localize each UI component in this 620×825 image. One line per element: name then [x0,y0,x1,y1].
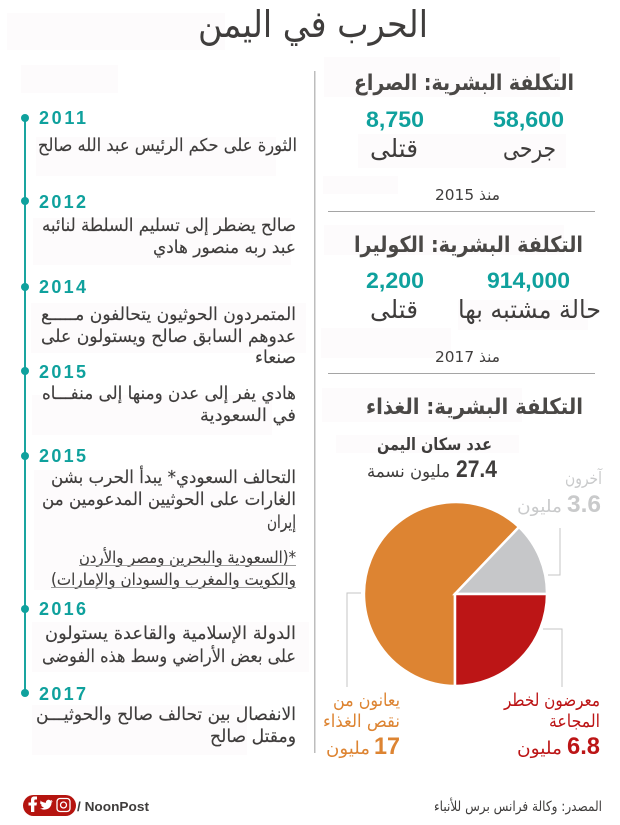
label: at risk of famine [503,691,600,760]
label: at risk of famine: 6.8 [567,733,600,760]
event 2011: الثورة على حكم الرئيس عبد الله صالح [38,136,297,156]
event 2017: ومقتل صالح [210,727,296,747]
event 2017: الانفصال بين تحالف صالح والحوثيـــن [36,705,296,725]
event 2015 coalition: التحالف السعودي* يبدأ الحرب بشن [51,465,296,488]
event 2012: 2012 [39,192,86,212]
stat: killed: 2,200 [366,268,424,293]
population label: عدد سكان اليمن [377,435,492,455]
stat: wounded [493,107,564,163]
population label: 27.4 [456,456,498,483]
event 2015 Hadi: في السعودية [200,406,296,426]
event 2012 [21,192,296,258]
event 2017 [21,684,296,747]
stat: suspected cases: 914,000 [487,268,570,293]
label: others: 3.6 [567,491,601,518]
heading: cholera: التكلفة البشرية: الكوليرا [354,233,583,258]
label: food shortage: مليون [326,739,370,759]
event 2016: على بعض الأراضي وسط هذه الفوضى [42,645,296,667]
event 2012: عبد ربه منصور هادي [153,238,296,258]
label: food shortage [323,691,400,760]
label: others: آخرون [565,467,603,489]
coalition footnote: والكويت والمغرب والسودان والإمارات) [51,570,296,590]
label: at risk of famine: مليون [517,739,562,759]
label: at risk of famine: معرضون لخطر [503,691,600,711]
event 2014 [21,277,296,368]
event 2015 coalition: إيران [267,513,296,533]
event 2014: المتمردون الحوثيون يتحالفون مـــــع [41,305,296,325]
heading: food: التكلفة البشرية: الغذاء [366,395,583,420]
coalition footnote: *(السعودية والبحرين ومصر والأردن [79,547,296,568]
label: others [517,467,603,518]
stat: suspected cases [458,268,601,325]
population label: مليون نسمة [367,462,450,482]
panel: conflict cost [354,71,574,204]
label: at risk of famine: المجاعة [549,712,600,732]
stat: wounded: 58,600 [493,107,564,132]
leader lines [347,528,562,687]
stat: killed [366,268,424,324]
event 2016: 2016 [39,599,86,619]
label: food shortage: 17 [374,733,400,760]
stat: killed: قتلى [370,134,418,163]
event 2016 [21,599,296,667]
event 2015 coalition [21,446,296,533]
label: food shortage: يعانون من [333,691,400,711]
event 2011 [21,108,297,156]
event 2015 Hadi [21,362,296,426]
timeline axis [24,118,26,693]
event 2014: 2014 [39,277,86,297]
panel: cholera cost [354,233,601,366]
coalition footnote [51,547,296,590]
social logo [23,795,150,816]
population label [367,435,498,483]
event 2012: صالح يضطر إلى تسليم السلطة لنائبه [42,216,296,236]
event 2015 coalition: الغارات على الحوثيين المدعومين من [42,490,296,510]
since 2015: منذ 2015 [435,186,500,204]
event 2015 coalition: 2015 [39,446,86,466]
event 2016: الدولة الإسلامية والقاعدة يستولون [45,624,296,644]
event 2017: 2017 [39,684,86,704]
event 2014: عدوهم السابق صالح ويستولون على [41,327,296,347]
stat: killed: 8,750 [366,107,424,132]
brand name: / NoonPost [77,799,150,814]
label: others: مليون [517,497,562,517]
heading: conflict: التكلفة البشرية: الصراع [354,71,574,96]
stat: suspected cases: حالة مشتبه بها [458,295,601,325]
stat: wounded: جرحى [503,134,556,163]
event 2015 Hadi: هادي يفر إلى عدن ومنها إلى منفـــاه [42,384,296,404]
stat: killed: قتلى [370,295,418,324]
social icons pill [23,795,76,816]
event 2014: صنعاء [255,348,296,368]
label: food shortage: نقص الغذاء [323,712,400,732]
panel: food cost [323,395,603,760]
event 2015 Hadi: 2015 [39,362,86,382]
pie chart [364,502,547,686]
timeline panel [21,108,297,747]
stat: killed [366,107,424,163]
title: الحرب في اليمن [198,3,428,46]
since 2017: منذ 2017 [435,348,500,366]
event 2011: 2011 [39,108,86,128]
